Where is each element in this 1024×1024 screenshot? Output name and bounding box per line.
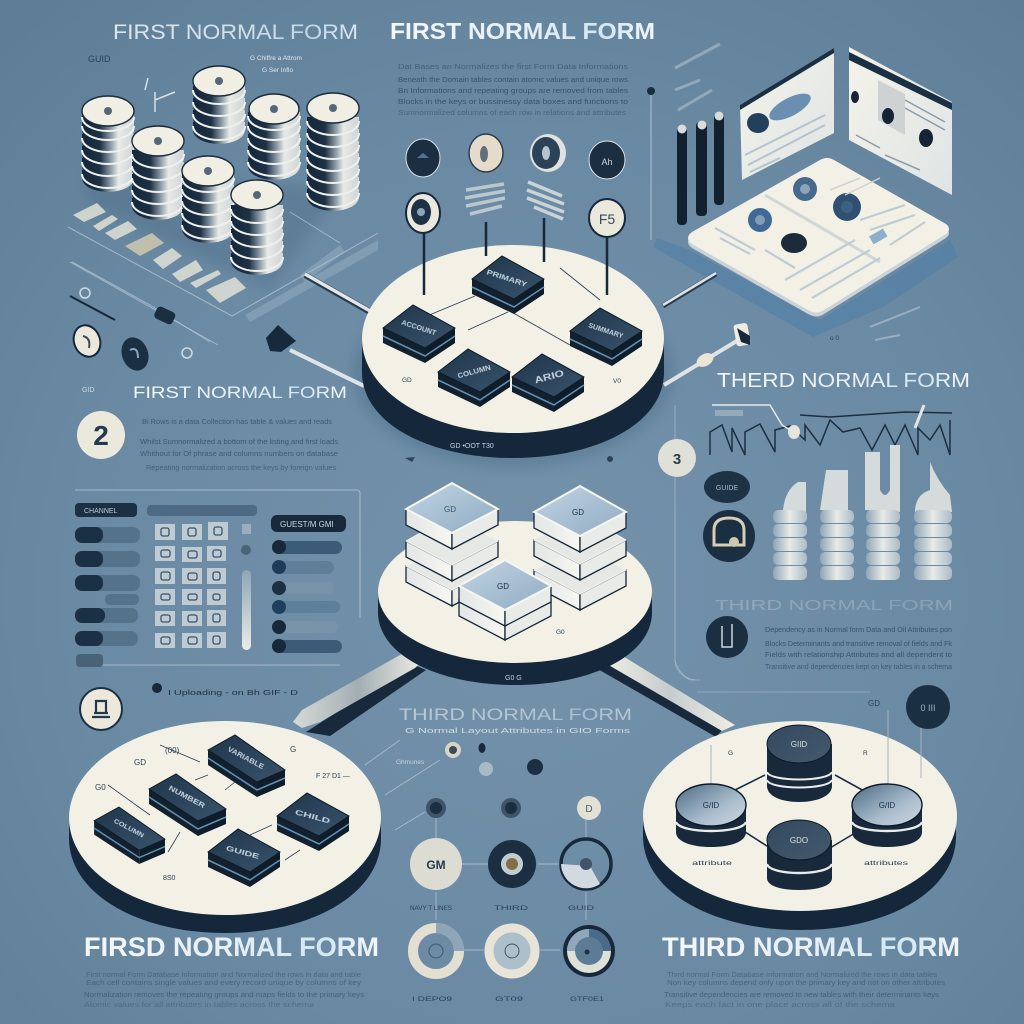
title: first normal form top left: FIRST NORMAL FORM	[113, 21, 358, 44]
faded title: third normal form: THIRD NORMAL FORM	[715, 597, 953, 614]
paragraph: first normal form: Whithout for Of phrase and columns numbers on database	[140, 451, 338, 458]
base content	[793, 177, 817, 201]
small labels: GUID	[88, 54, 111, 64]
cylinder back: GIID	[791, 740, 807, 749]
block: COLUMN	[112, 818, 145, 840]
box stack right	[534, 486, 626, 552]
marker	[530, 134, 566, 172]
box stack front	[459, 574, 551, 640]
title: first normal form left: FIRST NORMAL FORM	[133, 383, 347, 402]
platform: middle stacked tables: G0 G	[505, 675, 522, 682]
node	[501, 798, 521, 818]
dark pill icon	[704, 471, 750, 503]
paragraph: top center: Blocks in the keys or bussinessy data boxes and functions to	[398, 99, 628, 106]
labels by pillars	[675, 44, 720, 110]
connectors: central platform	[266, 273, 751, 386]
bottom captions: o 0	[830, 335, 839, 342]
block: ACCOUNT	[400, 320, 437, 338]
right wall sheet	[849, 47, 952, 195]
marker	[469, 134, 503, 172]
panel: node diagram: GTF0E1	[570, 996, 605, 1003]
box stack left: GD	[444, 505, 456, 514]
vertical slider	[242, 570, 251, 650]
bars with stacked disks	[773, 445, 952, 580]
left pills	[75, 527, 140, 667]
box stack left	[406, 515, 498, 581]
box stack front: GD	[497, 582, 509, 591]
block	[570, 308, 642, 366]
panel: third normal form chart	[658, 405, 952, 680]
marker: dark pin badge: 0 III	[920, 703, 936, 713]
cylinder right	[852, 784, 922, 847]
node: GM	[426, 858, 446, 872]
paragraph: bottom left: Each cell contains single values and every record unique by columns of key	[86, 980, 362, 987]
donut	[413, 928, 459, 974]
badge 3	[658, 439, 696, 477]
block: VARIABLE	[226, 746, 265, 771]
platform: entity blocks	[69, 721, 381, 933]
paragraph: bottom left: Normalization removes the repeating groups and maps fields to the primary keys	[84, 992, 365, 999]
block: CHILD	[294, 809, 331, 825]
paragraph: top center	[398, 64, 629, 117]
small dots: Ghmunes	[396, 759, 425, 766]
cylinder front	[767, 820, 832, 890]
paragraph: bottom right	[664, 972, 946, 1009]
block	[208, 829, 280, 887]
base shadow edge	[653, 238, 958, 337]
base sheet	[688, 158, 949, 312]
panel: coin stacks with glass tray: G Ser Inflo	[262, 67, 293, 74]
badge 3: 3	[673, 451, 681, 468]
marker	[406, 193, 440, 233]
paragraph: top center: Dat Bases an Normalizes the first Form Data Informations	[398, 64, 629, 71]
title: third normal form right: THERD NORMAL FORM	[717, 370, 970, 392]
node	[577, 796, 601, 820]
platform: database cylinders: G	[728, 750, 733, 757]
paragraph: top center: Sumnormalized columns of each row in relations and attributes	[398, 110, 627, 117]
paragraph: top center: Bn Informations and repeating groups are removed from tables	[398, 88, 629, 95]
stack	[132, 126, 184, 220]
platform: database cylinders	[643, 699, 957, 930]
paragraph: first normal form: Whilst Sumnormalized a bottom of the listing and first loads	[140, 439, 339, 446]
panel: node diagram: I DEPO9	[412, 996, 453, 1003]
platform: central data table platform	[362, 218, 664, 458]
paragraph: third normal form: Fields with relationship Attributes and all dependent to	[765, 652, 952, 659]
badge: number 2: 2	[93, 420, 109, 451]
node	[561, 839, 611, 889]
node	[410, 838, 462, 890]
caption strip: I Uploading - on Bh GIF - D	[168, 690, 298, 697]
box stack left	[406, 540, 498, 606]
icon: dark badge	[706, 616, 748, 658]
stack	[193, 66, 245, 144]
marker pin	[650, 94, 652, 240]
cylinder right: G/ID	[879, 801, 895, 810]
platform: middle stacked tables: G0	[556, 629, 565, 636]
block: SUMMARY	[587, 323, 624, 340]
cylinder left	[676, 784, 746, 847]
block	[277, 793, 349, 851]
stack	[307, 93, 359, 211]
panel: coin stacks with glass tray: G Chiffre a Attrom	[250, 55, 302, 62]
box stack front	[459, 560, 551, 626]
platform: database cylinders: GD	[868, 699, 880, 708]
block	[208, 735, 285, 797]
panel: node diagram: GT09	[495, 996, 524, 1003]
paragraph: bottom right: Non key columns depend only upon the primary key and not on other attributes	[667, 980, 946, 987]
platform: database cylinders: R	[863, 750, 868, 757]
stack	[82, 96, 134, 192]
small tray cards	[73, 203, 246, 303]
badge: number 2	[77, 411, 125, 459]
paragraph: third normal form	[675, 627, 953, 692]
title: first normal form bottom left: FIRSD NORMAL FORM	[84, 932, 379, 962]
marker F5: F5	[599, 211, 615, 227]
dark pill icon: GUIDE	[716, 485, 738, 492]
paragraph: bottom left: First normal Form Database Information and Normalized the rows in data and table	[86, 972, 361, 979]
marker: small central	[405, 456, 613, 462]
panel: isometric document	[647, 44, 958, 342]
paragraph: bottom right: Keeps each fact in one place across all of the schema	[665, 1002, 895, 1009]
donut	[489, 928, 535, 974]
dark icon	[703, 510, 755, 562]
panel: node diagram: GUID	[568, 905, 594, 912]
paragraph: third normal form: Blocks Determinants and transitive removal of fields and Fk	[765, 641, 953, 648]
block	[149, 774, 226, 836]
platform: middle stacked tables	[378, 483, 652, 685]
links	[735, 775, 875, 848]
block	[383, 305, 455, 363]
paragraph: top center: Beneath the Domain tables contain atomic values and unique rows	[398, 77, 629, 84]
pin lines	[423, 232, 425, 295]
panel: table of attributes	[75, 490, 360, 667]
platform: central data table platform: GD •OOT T30	[450, 443, 494, 450]
box stack right: GD	[572, 508, 584, 517]
block	[512, 354, 584, 412]
platform: entity blocks: G	[290, 745, 296, 754]
small tag: GID	[82, 387, 94, 394]
donut	[563, 925, 615, 977]
grid cells	[155, 522, 228, 648]
platform: database cylinders: attributes	[864, 860, 909, 867]
block: COLUMN	[457, 365, 492, 380]
platform: entity blocks: GD	[134, 758, 146, 767]
right pills	[272, 540, 342, 653]
platform: entity blocks: F 27 D1 —	[316, 773, 350, 780]
stack	[231, 180, 283, 275]
paragraph: third normal form: Dependency as in Normal form Data and Oil Attributes pon	[765, 627, 952, 634]
node	[426, 798, 446, 818]
box stack right	[534, 544, 626, 610]
title: third normal form center faded: THIRD NORMAL FORM	[399, 705, 632, 724]
badge: left numbered circle	[80, 688, 122, 730]
header pills	[75, 503, 137, 517]
marker: dark pin badge	[906, 685, 950, 729]
caption strip	[152, 683, 298, 697]
icons: lower left markers	[69, 262, 210, 374]
paragraph: bottom left	[84, 972, 365, 1009]
subtitle: center faded: G Normal Layout Attributes in GIO Forms	[405, 728, 631, 735]
marker	[589, 141, 625, 179]
paragraph: bottom right: Third normal Form Database Information and Normalized the rows in data tables	[667, 972, 938, 979]
stack	[248, 94, 300, 180]
paragraph: third normal form: Transitive and dependencies kept on key tables in a schema	[765, 664, 952, 671]
marker	[406, 139, 440, 177]
panel: coin stacks with glass tray	[68, 54, 378, 345]
block: NUMBER	[167, 785, 206, 810]
box stack right	[534, 514, 626, 580]
cylinder left: G/ID	[703, 801, 719, 810]
stack	[182, 156, 234, 243]
block: GUIDE	[225, 845, 260, 861]
base side	[688, 162, 949, 316]
block	[438, 349, 510, 407]
paragraph: first normal form: Bi Rows is a data Collection has table & values and reads	[142, 419, 333, 426]
title: first normal form top center: FIRST NORMAL FORM	[390, 18, 655, 44]
labels: attribute	[692, 860, 733, 867]
cylinder back	[767, 725, 832, 802]
striped marker	[465, 184, 505, 214]
block	[472, 256, 544, 314]
labels: NAVY T LINES	[410, 905, 453, 912]
panel: node diagram	[365, 740, 615, 1003]
striped marker	[527, 182, 564, 219]
platform: entity blocks: 8S0	[163, 875, 176, 882]
tray outline	[68, 212, 378, 345]
line chart	[710, 420, 950, 455]
marker: Ah	[601, 157, 613, 167]
block: PRIMARY	[486, 269, 528, 289]
small dots	[396, 742, 543, 776]
connectors: lower wide bands	[293, 650, 735, 737]
paragraph: bottom left: Atomic values for all attributes in tables across the schema	[84, 1002, 314, 1009]
dark pillars	[677, 112, 724, 225]
paragraph: first normal form	[140, 419, 339, 472]
paragraph: bottom right: Transitive dependencies are removed to new tables with their determinants keys	[664, 992, 940, 999]
platform: central data table platform: V0	[613, 378, 621, 385]
central platform shadow	[353, 276, 673, 468]
block: ARIO	[533, 368, 565, 385]
node: D	[585, 804, 593, 815]
panel: table of attributes: GUEST/M GMI	[280, 520, 334, 529]
labels: GD	[402, 377, 412, 384]
left wall sheet	[740, 48, 834, 180]
marker F5	[589, 199, 625, 237]
panel: table of attributes: CHANNEL	[84, 508, 118, 515]
platform: entity blocks: G0	[95, 783, 106, 792]
box stack left	[406, 483, 498, 549]
panel: node diagram: THIRD	[494, 905, 529, 912]
shadow	[85, 170, 340, 290]
block	[94, 807, 165, 864]
title: third normal form bottom right: THIRD NORMAL FORM	[662, 932, 960, 962]
paragraph: first normal form: Repeating normalization across the keys by foreign values	[146, 465, 337, 472]
node	[488, 840, 536, 888]
icons: top row markers	[406, 134, 625, 237]
cylinder front: GDO	[790, 836, 808, 845]
labels: (00)	[165, 746, 180, 755]
